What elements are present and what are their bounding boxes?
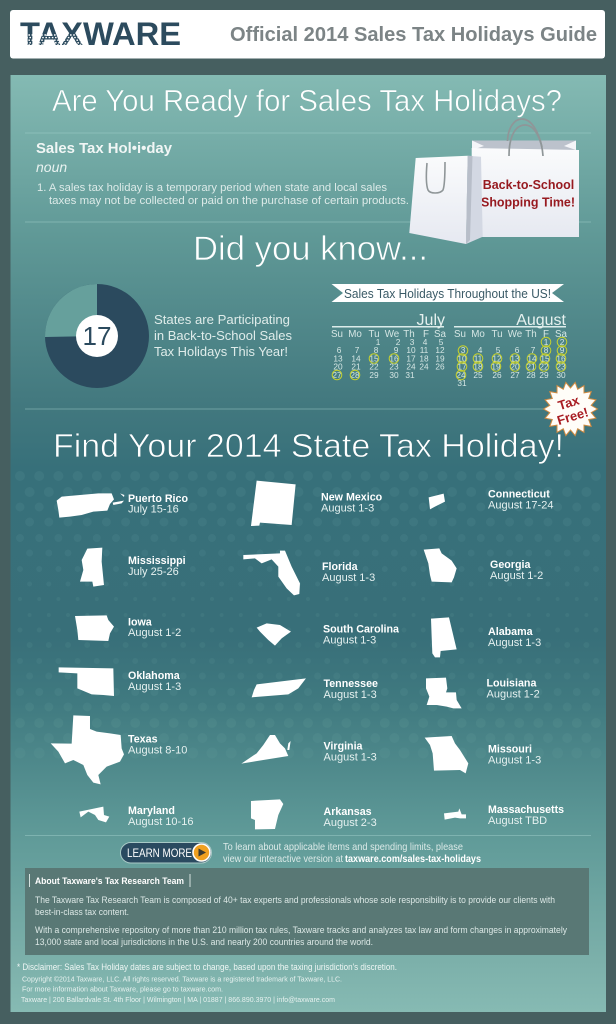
calendar: July: 12 — [435, 345, 445, 355]
state label: South Carolina: South Carolina — [323, 624, 400, 636]
map: Connecticut — [429, 494, 445, 509]
calendar: August: 21 — [526, 362, 536, 372]
badge: Tax Free: Free! — [555, 404, 590, 428]
map: New Mexico — [251, 481, 296, 526]
state label: Georgia: August 1-2 — [490, 570, 543, 582]
calendar: August: Mo — [471, 329, 485, 340]
state label: Louisiana — [486, 678, 540, 700]
calendar: July: 14 — [351, 354, 361, 364]
map: Missouri — [425, 736, 468, 773]
calendar: July — [331, 312, 447, 380]
calendar: July: 23 — [389, 362, 399, 372]
map: Mississippi — [80, 548, 104, 587]
state label: Arkansas — [324, 806, 377, 829]
about text — [35, 895, 567, 947]
state label: Tennessee: August 1-3 — [324, 689, 377, 701]
state label: Oklahoma: August 1-3 — [128, 681, 181, 693]
state label: Missouri: August 1-3 — [488, 754, 541, 766]
state label: Florida: August 1-3 — [322, 572, 375, 584]
state label: Iowa — [128, 616, 181, 639]
badge: Tax Free — [544, 382, 598, 436]
calendar: August: August — [516, 312, 567, 329]
state label: New Mexico — [321, 492, 383, 514]
learn more button: LEARN MORE — [127, 846, 192, 860]
calendar: August: 9 — [560, 345, 565, 355]
state label: Texas — [128, 734, 187, 756]
bag label: Back-to-School — [483, 177, 574, 192]
state maps, right column — [424, 494, 457, 657]
calendar: July: 6 — [337, 345, 342, 355]
state label: Georgia: Georgia — [490, 559, 531, 571]
calendar: August: Su — [454, 329, 466, 340]
state label: Puerto Rico: Puerto Rico — [128, 493, 188, 505]
state label: Texas: August 8-10 — [128, 744, 187, 756]
learn more text: view our interactive version at — [223, 853, 343, 865]
definition block — [36, 140, 409, 207]
calendar: August: 3 — [461, 345, 466, 355]
calendar: August: Tu — [491, 329, 503, 340]
state label: Connecticut: Connecticut — [488, 488, 550, 500]
calendar: August: 5 — [496, 345, 501, 355]
state maps, middle column — [243, 481, 300, 646]
calendar: July: 24 — [419, 362, 429, 372]
calendar: July: Th — [403, 329, 415, 340]
disclaimer: * Disclaimer: Sales Tax Holiday dates are subject to change, based upon the taxing jurisdiction's discretion. — [17, 962, 397, 972]
calendar: July: 1 — [376, 337, 381, 347]
badge: Tax Free: Tax — [556, 392, 582, 413]
state label: Missouri: Missouri — [488, 744, 532, 756]
calendar: July: Su — [331, 329, 343, 340]
state label: Alabama: August 1-3 — [488, 637, 541, 649]
calendar: July: 8 — [374, 345, 379, 355]
map: Tennessee — [252, 678, 306, 697]
map: Arkansas — [251, 799, 283, 829]
state label: Alabama — [488, 626, 541, 649]
calendar: August: 15 — [540, 354, 550, 364]
calendar: August: 10 — [457, 354, 467, 364]
calendar: July: Sa — [434, 329, 447, 340]
state label: New Mexico: New Mexico — [321, 492, 383, 504]
state label: South Carolina: August 1-3 — [323, 634, 376, 646]
state label: Florida — [322, 561, 375, 584]
state label: Oklahoma: Oklahoma — [128, 670, 181, 682]
learn more text: To learn about applicable items and spending limits, please — [223, 841, 463, 853]
calendar: August: 19 — [491, 362, 501, 372]
calendar: July: 5 — [439, 337, 444, 347]
pie chart caption: Tax Holidays This Year! — [154, 344, 288, 359]
state label: Virginia: Virginia — [324, 740, 364, 752]
state maps, left column — [57, 493, 124, 641]
calendar: July: 28 — [350, 370, 360, 380]
calendar: August: 8 — [544, 345, 549, 355]
map: Maryland — [79, 807, 109, 822]
front bag — [409, 156, 483, 244]
calendar: July: 26 — [435, 362, 445, 372]
map: Virginia — [241, 735, 291, 764]
calendar: August: 18 — [473, 362, 483, 372]
state label: Louisiana: Louisiana — [486, 678, 537, 690]
calendar: August: 22 — [539, 362, 549, 372]
calendar: August: 29 — [539, 370, 549, 380]
calendar: July: 13 — [333, 354, 343, 364]
calendar: July: 9 — [394, 345, 399, 355]
map: Texas — [51, 715, 124, 784]
pie chart caption: in Back-to-School Sales — [154, 328, 292, 343]
learn more text: taxware.com/sales-tax-holidays — [345, 853, 481, 865]
calendar: July: July — [417, 312, 445, 329]
copyright footer: For more information about Taxware, please go to taxware.com. — [22, 984, 223, 994]
state label: Mississippi — [128, 555, 186, 578]
about text: best-in-class tax content. — [35, 907, 129, 917]
pie chart caption — [154, 312, 292, 359]
definition text — [37, 182, 409, 207]
calendar: July: 10 — [406, 345, 416, 355]
copyright footer: Taxware | 200 Ballardvale St. 4th Floor | Wilmington | MA | 01887 | 866.890.3970 | info@taxware.com — [21, 995, 335, 1004]
state label: Connecticut — [488, 488, 553, 512]
heading: did you know: Did you know... — [193, 230, 428, 268]
map: Oklahoma — [59, 667, 114, 696]
calendar: July: 3 — [410, 337, 415, 347]
state label: Maryland — [128, 805, 193, 828]
calendar: July: Mo — [348, 329, 362, 340]
definition text: 1. A sales tax holiday is a temporary period when state and local sales — [37, 182, 388, 194]
definition text: taxes may not be collected or paid on the purchase of certain products. — [49, 195, 409, 207]
calendar: July: 16 — [389, 354, 399, 364]
calendar: August: 12 — [492, 354, 502, 364]
heading: find your state: Find Your 2014 State Tax Holiday! — [53, 428, 564, 465]
copyright footer: Copyright ©2014 Taxware, LLC. All rights reserved. Taxware is a registered trademark of Taxware, LLC. — [22, 974, 342, 984]
calendar: July: 19 — [435, 354, 445, 364]
calendar: July: 30 — [389, 370, 399, 380]
pie chart: 17 states — [45, 284, 149, 388]
calendar: July: 18 — [419, 354, 429, 364]
learn more button — [120, 842, 212, 863]
calendar: July: 22 — [369, 362, 379, 372]
calendar: August: F — [543, 329, 549, 340]
state label: Connecticut: August 17-24 — [488, 500, 553, 512]
state label: Puerto Rico: July 15-16 — [128, 504, 179, 516]
calendar: August: 27 — [510, 370, 520, 380]
calendar: August: 24 — [456, 370, 466, 380]
state label: Massachusetts — [488, 804, 564, 827]
calendar: August: 26 — [492, 370, 502, 380]
calendar: August: Th — [525, 329, 537, 340]
state label: Maryland: Maryland — [128, 805, 175, 817]
bag label — [481, 177, 575, 210]
about text: 13,000 state and local jurisdictions in the U.S. and nearly 200 countries around the world. — [35, 937, 373, 947]
calendar: August: 25 — [473, 370, 483, 380]
calendar: July: 27 — [332, 370, 342, 380]
calendar: July: We — [385, 329, 400, 340]
calendar: August: 11 — [474, 354, 483, 364]
calendar: July: 21 — [351, 362, 361, 372]
header title: Official 2014 Sales Tax Holidays Guide — [230, 24, 597, 46]
calendar: August: 28 — [526, 370, 536, 380]
state label: Florida: Florida — [322, 561, 359, 573]
state label: Puerto Rico — [128, 493, 188, 516]
calendar: August: 6 — [515, 345, 520, 355]
calendar: August: 1 — [544, 337, 549, 347]
calendar: July: 15 — [369, 354, 379, 364]
calendar: July: Tu — [368, 329, 380, 340]
state label: Mississippi: July 25-26 — [128, 566, 179, 578]
state label: Missouri — [488, 744, 541, 766]
ribbon banner: Sales Tax Holidays Throughout the US! — [344, 287, 551, 301]
icon: shopping bags — [409, 119, 579, 244]
state label: New Mexico: August 1-3 — [321, 502, 374, 514]
calendar: August: 7 — [531, 345, 536, 355]
state label: Arkansas: Arkansas — [324, 806, 372, 818]
learn more text — [223, 841, 481, 865]
calendar: July: 2 — [396, 337, 401, 347]
bag label: Shopping Time! — [481, 195, 575, 210]
part of speech: noun — [36, 159, 67, 175]
state label: Iowa: Iowa — [128, 616, 153, 628]
calendar: July: 17 — [406, 354, 416, 364]
calendar: July: 24 — [406, 362, 416, 372]
calendar: July: 7 — [355, 345, 360, 355]
map: Georgia — [424, 548, 457, 582]
calendar: July: 4 — [423, 337, 428, 347]
state label: Georgia — [490, 559, 543, 582]
calendar: July: 11 — [420, 345, 429, 355]
state label: Tennessee — [324, 678, 378, 701]
state label: Virginia — [324, 740, 377, 764]
calendar: July: F — [423, 329, 429, 340]
calendar: August: 31 — [457, 378, 467, 388]
state label: Virginia: August 1-3 — [324, 752, 377, 764]
definition term: Sales Tax Hol•i•day — [36, 140, 173, 157]
calendar: August: We — [508, 329, 523, 340]
calendar: August: 4 — [478, 345, 483, 355]
state label: Massachusetts: August TBD — [488, 815, 547, 827]
calendar: July: 29 — [369, 370, 379, 380]
calendar: August: 23 — [556, 362, 566, 372]
state label: South Carolina — [323, 624, 400, 646]
calendar: July: 31 — [405, 370, 415, 380]
calendar: July: 20 — [333, 362, 343, 372]
map: Iowa — [75, 615, 114, 641]
state label: Iowa: August 1-2 — [128, 627, 181, 639]
calendar: August: 30 — [556, 370, 566, 380]
header bar — [10, 10, 605, 58]
map: Alabama — [431, 617, 457, 657]
pie chart caption: States are Participating — [154, 312, 290, 327]
calendar: August — [454, 312, 568, 388]
back bag — [472, 119, 579, 237]
panel: about the research team — [25, 868, 589, 955]
map: Florida — [243, 551, 300, 595]
state label: Arkansas: August 2-3 — [324, 817, 377, 829]
about heading: About Taxware's Tax Research Team — [35, 876, 184, 887]
logo: Taxware: TAXWARE — [20, 16, 181, 52]
main heading: Are You Ready for Sales Tax Holidays? — [52, 84, 562, 118]
calendar: August: 2 — [560, 337, 565, 347]
state label: Maryland: August 10-16 — [128, 816, 193, 828]
pie chart: 17 states: 17 — [83, 321, 111, 351]
state label: Tennessee: Tennessee — [324, 678, 378, 690]
calendar: August: 17 — [457, 362, 467, 372]
map: Massachusetts — [444, 808, 466, 820]
about text: With a comprehensive repository of more than 210 million tax rules, Taxware tracks and analyzes tax law and form changes in approximately — [35, 925, 567, 935]
state label: Louisiana: August 1-2 — [486, 688, 540, 700]
map: South Carolina — [257, 623, 291, 646]
state label: Alabama: Alabama — [488, 626, 534, 638]
map: Louisiana — [426, 678, 462, 708]
state label: Mississippi: Mississippi — [128, 555, 186, 567]
calendar: August: 13 — [510, 354, 520, 364]
state label: Massachusetts: Massachusetts — [488, 804, 564, 816]
calendar: August: Sa — [555, 329, 568, 340]
map: Puerto Rico — [57, 493, 124, 518]
state label: Texas: Texas — [128, 734, 158, 746]
calendar: August: 14 — [527, 354, 537, 364]
about text: The Taxware Tax Research Team is composed of 40+ tax experts and professionals whose sole responsibility is to provide our clients with — [35, 895, 555, 905]
calendar: August: 16 — [556, 354, 566, 364]
copyright footer — [21, 974, 342, 1004]
calendar: August: 20 — [510, 362, 520, 372]
state label: Oklahoma — [128, 670, 181, 693]
